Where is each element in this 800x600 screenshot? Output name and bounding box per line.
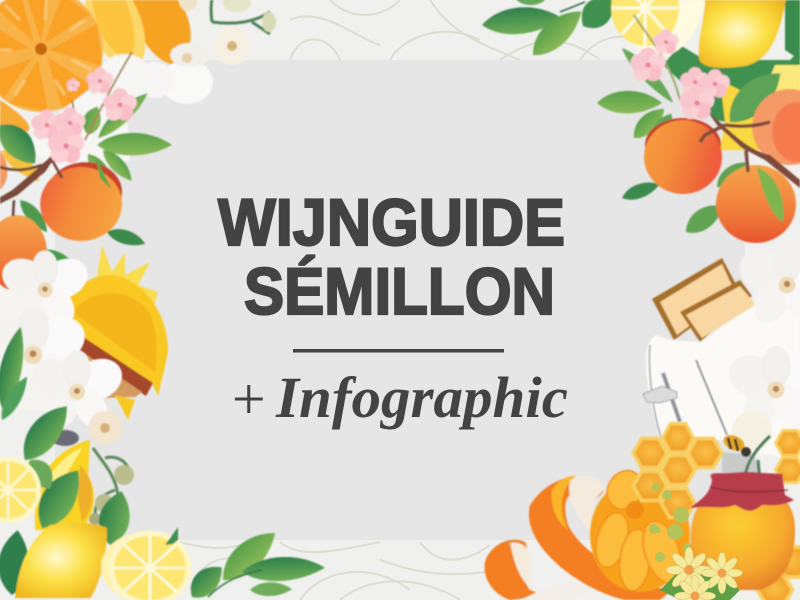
title line 1: WIJNGUIDE xyxy=(218,185,565,259)
big orange slice xyxy=(0,0,103,133)
subtitle xyxy=(228,365,568,432)
art: orange peel xyxy=(485,475,670,600)
lemon whole xyxy=(15,523,107,598)
art: daisies xyxy=(660,547,743,600)
art: toaster with toast xyxy=(643,258,800,460)
lemon slice xyxy=(615,0,706,55)
art: small green flower sprigs xyxy=(649,483,693,562)
lemon pear xyxy=(35,440,94,530)
art: top orchid and vine xyxy=(179,0,276,65)
leaves xyxy=(0,324,135,596)
blossoms xyxy=(31,68,137,163)
white flower xyxy=(97,43,213,106)
lemon slice left xyxy=(0,457,41,523)
lemon xyxy=(699,0,786,68)
infographic word: Infographic xyxy=(275,365,568,430)
orange wedges xyxy=(85,0,191,69)
art: bee xyxy=(721,432,770,482)
leaves xyxy=(597,91,662,113)
peach right xyxy=(40,158,122,241)
twigs xyxy=(634,15,680,100)
title xyxy=(218,185,565,328)
peaches xyxy=(644,89,800,243)
right leaves xyxy=(183,558,230,600)
twigs xyxy=(72,52,132,140)
plus sign: + xyxy=(228,366,268,432)
lemon half xyxy=(101,531,192,600)
art: top-left fruit cluster xyxy=(0,0,213,291)
branch xyxy=(0,155,55,204)
peel big xyxy=(529,477,670,600)
branch xyxy=(708,112,800,188)
art: right orchids xyxy=(721,241,800,451)
art: tangerine xyxy=(590,464,690,592)
peach left xyxy=(0,215,47,291)
peel small xyxy=(485,540,545,600)
toast slices xyxy=(652,258,755,342)
toaster body xyxy=(646,300,800,460)
blossoms xyxy=(630,29,730,119)
title line 2: SÉMILLON xyxy=(244,254,555,328)
bright white background behind blossoms xyxy=(30,77,130,180)
art: honeycomb xyxy=(631,422,800,600)
art: hay bale xyxy=(60,245,168,420)
central grey panel xyxy=(55,60,745,540)
buds and vine xyxy=(89,448,134,525)
art: left orchids xyxy=(0,250,129,446)
art: bottom-left lemons and leaves xyxy=(0,324,325,600)
leaves xyxy=(0,87,172,285)
dark leaves behind xyxy=(663,45,800,125)
art: top-right lemons and leaves xyxy=(481,0,800,243)
art: honey jar xyxy=(690,472,795,590)
divider rule xyxy=(293,349,504,352)
